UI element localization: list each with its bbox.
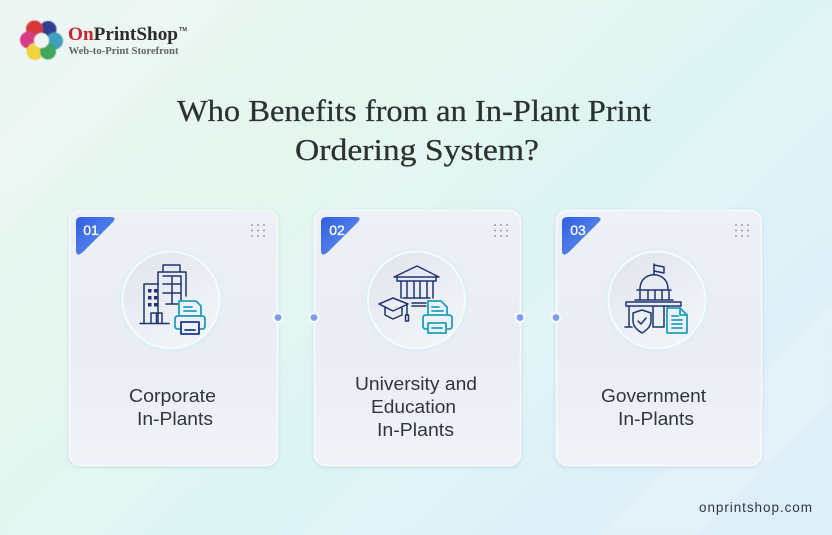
badge 03: 03 <box>570 222 586 238</box>
panel: card 3 government <box>556 210 762 466</box>
dot grid <box>735 224 749 237</box>
title <box>177 94 652 167</box>
badge 01: 01 <box>83 222 99 238</box>
connector: card 2 to card 3 <box>480 316 596 318</box>
website url: onprintshop.com <box>699 500 812 515</box>
label: In-Plants <box>618 409 694 429</box>
dot grid <box>494 224 508 237</box>
logo <box>20 20 187 60</box>
badge 02 <box>321 217 360 255</box>
logo wordmark: OnPrintShop <box>68 25 178 45</box>
logo icon: colour petals <box>20 20 63 60</box>
title: Ordering System? <box>295 133 539 167</box>
label <box>355 374 477 440</box>
label <box>129 386 216 429</box>
logo tagline: Web-to-Print Storefront <box>68 46 179 57</box>
label <box>601 386 706 429</box>
label: Government <box>601 386 706 406</box>
connector: card 1 to card 2 <box>238 316 354 318</box>
dot grid <box>251 224 265 237</box>
label: Corporate <box>129 386 216 406</box>
label: University and <box>355 374 477 394</box>
label: Education <box>371 397 456 417</box>
label: In-Plants <box>377 420 454 440</box>
icon circle <box>122 252 220 348</box>
badge 03 <box>562 217 601 255</box>
badge 01 <box>76 217 115 255</box>
icon: capitol, shield and document <box>625 264 687 333</box>
icon: institution, graduation cap and printer <box>379 266 452 333</box>
connector dots <box>272 312 562 324</box>
icon circle <box>608 252 706 348</box>
panel: card 2 university <box>314 210 520 466</box>
icon: office building with printer <box>140 265 205 334</box>
icon circle <box>368 252 465 348</box>
label: In-Plants <box>137 409 213 429</box>
logo trademark: TM <box>179 27 187 33</box>
panel: card 1 corporate <box>70 210 278 466</box>
title: Who Benefits from an In-Plant Print <box>177 94 652 128</box>
badge 02: 02 <box>329 222 345 238</box>
